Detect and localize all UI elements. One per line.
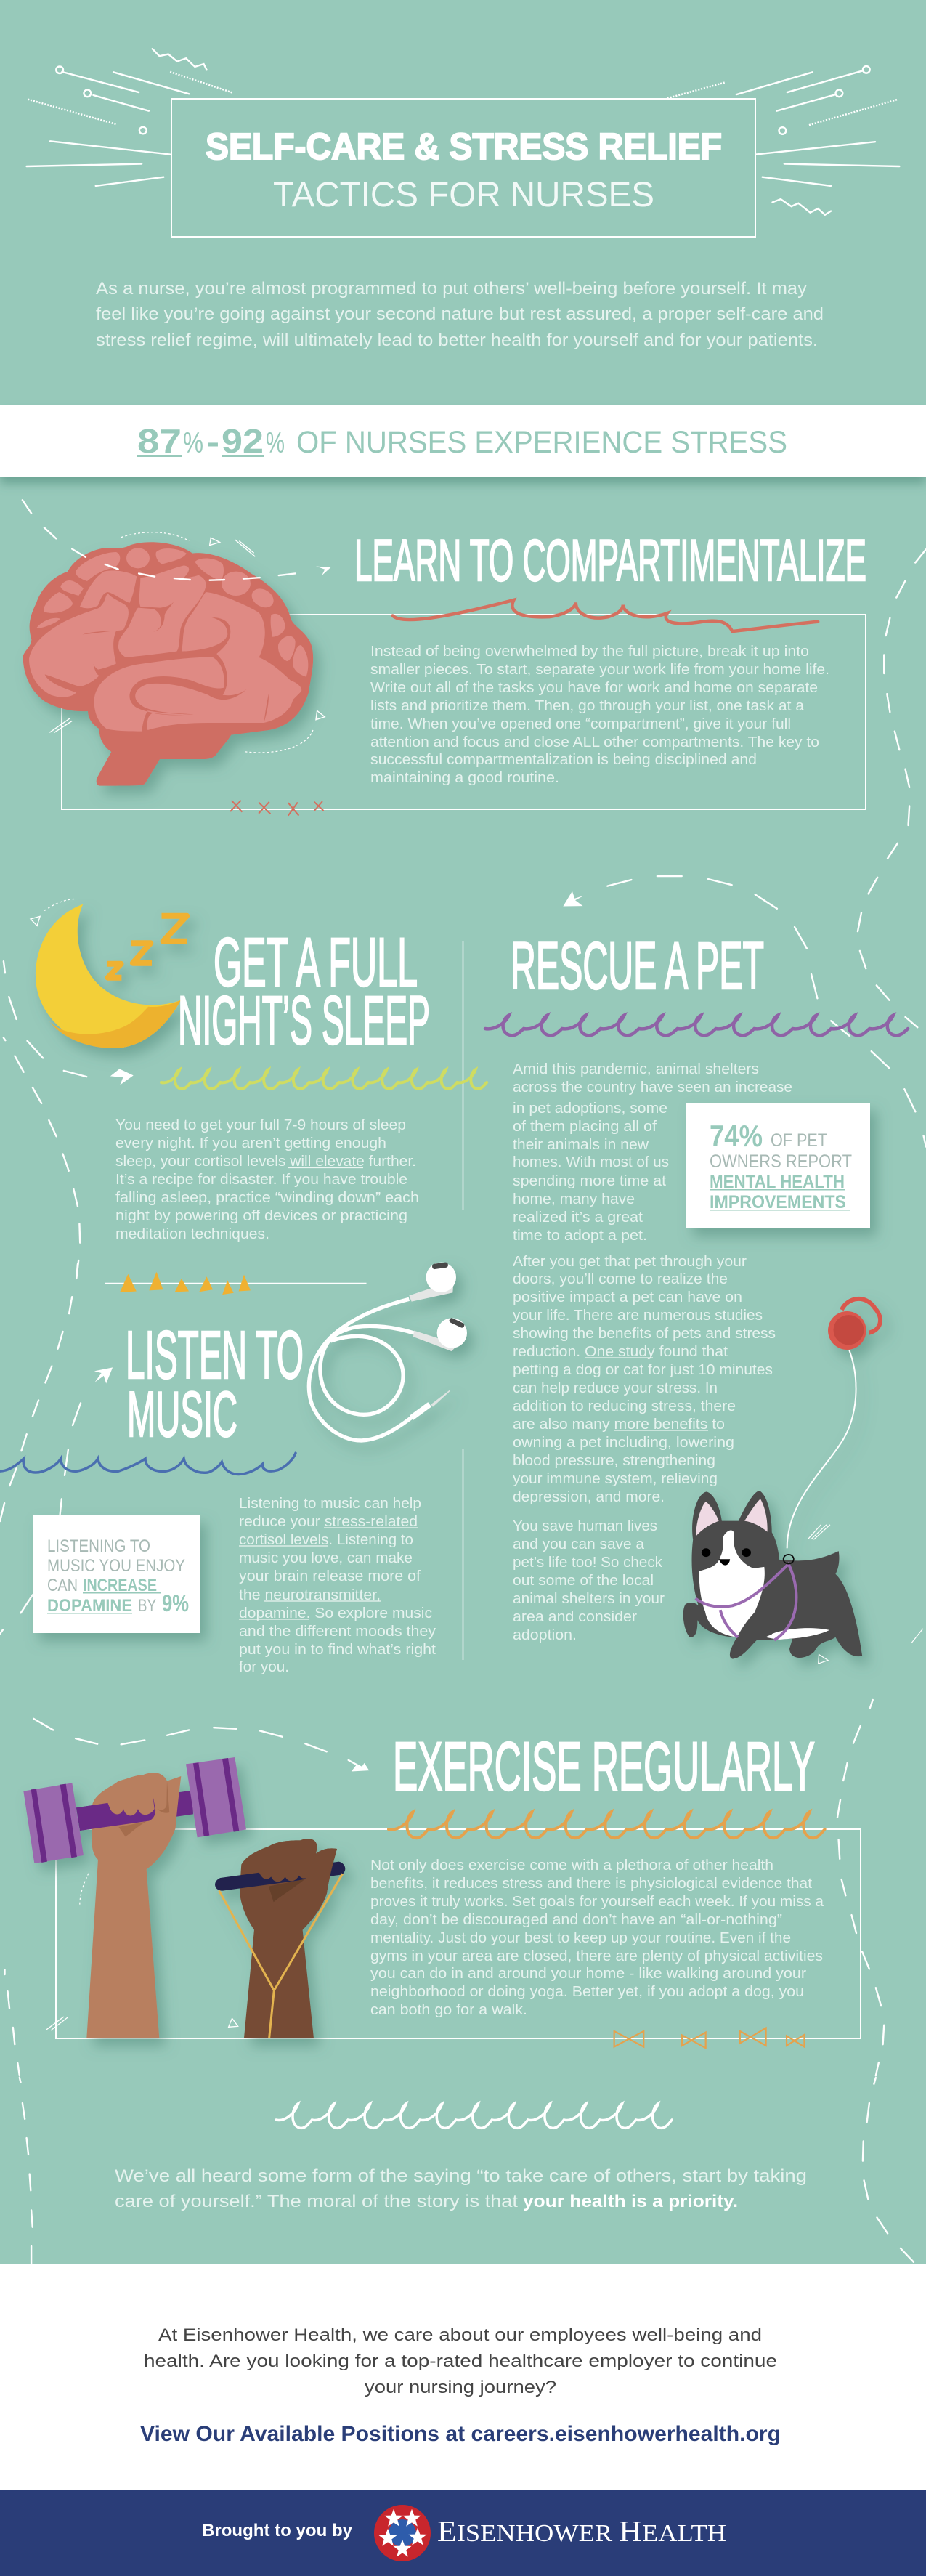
white squiggle <box>276 2104 672 2128</box>
green squiggle <box>161 1069 487 1089</box>
heading: GET A FULL <box>214 924 418 1001</box>
heading <box>126 1317 304 1450</box>
closing text: We’ve all heard some form of the saying “to take care of others, start by taking <box>115 2166 807 2186</box>
left dashed trail <box>4 899 134 1279</box>
callout: 74% <box>686 1103 870 1228</box>
callout: dopamine <box>33 1515 200 1633</box>
closing text: your health is a priority. <box>523 2192 738 2211</box>
employer text <box>144 2325 777 2397</box>
rescue body text: out some of the local <box>513 1573 654 1589</box>
closing section <box>20 2078 914 2264</box>
compartmentalize body text: attention and focus and close ALL other compartments. The key to <box>370 734 819 750</box>
column divider top <box>462 941 463 1210</box>
callout: 74%: MENTAL HEALTH <box>710 1172 845 1192</box>
panel: exercise regularly <box>5 1700 884 2075</box>
stat headline <box>137 422 787 460</box>
rescue body text: homes. With most of us <box>513 1154 669 1170</box>
footer call to action <box>0 2264 926 2490</box>
exercise body text: mentality. Just do your best to keep up your routine. Even if the <box>370 1930 791 1946</box>
stat band <box>0 405 926 477</box>
footer brand band <box>0 2490 926 2576</box>
dog body <box>683 1491 862 1658</box>
rescue body text: your immune system, relieving <box>513 1471 718 1487</box>
callout: dopamine: MUSIC YOU ENJOY <box>47 1556 185 1576</box>
employer text: health. Are you looking for a top-rated healthcare employer to continue <box>144 2352 777 2371</box>
rescue body text: are also many more benefits to <box>513 1417 725 1433</box>
dashed trails <box>5 1700 884 2075</box>
coral squiggle <box>393 600 818 631</box>
callout: dopamine: DOPAMINE <box>47 1596 132 1616</box>
stat headline: - <box>207 425 219 460</box>
callout: dopamine: INCREASE <box>83 1576 157 1595</box>
callout: 74%: OWNERS REPORT <box>710 1151 852 1172</box>
blue squiggle <box>0 1453 296 1474</box>
exercise body text: day, don’t be discouraged and don’t have an “all-or-nothing” <box>370 1912 782 1928</box>
side dashes <box>20 2078 914 2264</box>
music body text: your brain release more of <box>239 1568 421 1584</box>
stat headline: % <box>266 427 285 459</box>
music body text: and the different moods they <box>239 1624 436 1640</box>
content frame <box>62 615 866 809</box>
rescue body text: can help reduce your stress. In <box>513 1380 718 1396</box>
icon: arm with resistance band <box>215 1839 345 2038</box>
rescue body text: your life. There are numerous studies <box>513 1308 763 1324</box>
purple squiggle <box>485 1016 908 1035</box>
rescue body text: adoption. <box>513 1627 577 1643</box>
callout: dopamine: 9% <box>162 1590 189 1616</box>
closing text <box>115 2166 807 2211</box>
sleep body text <box>115 1117 419 1242</box>
exercise body text: benefits, it reduces stress and there is physiological evidence that <box>370 1876 812 1892</box>
rescue body text: owning a pet including, lowering <box>513 1435 734 1451</box>
rescue body text: pet’s life too! So check <box>513 1555 663 1571</box>
rescue body text: animal shelters in your <box>513 1591 665 1607</box>
panel: listen to music <box>0 1262 467 1675</box>
music body text <box>239 1496 436 1675</box>
exercise body text: gyms in your area are closed, there are plenty of physical activities <box>370 1948 823 1964</box>
intro text: stress relief regime, will ultimately lead to better health for yourself and for your patients. <box>96 331 818 350</box>
compartmentalize body text <box>370 644 829 786</box>
sleep body text: night by powering off devices or practicing <box>115 1208 407 1224</box>
header burst decoration <box>27 49 899 215</box>
rescue body text: depression, and more. <box>513 1489 665 1505</box>
yellow tick decoration <box>105 1272 367 1295</box>
sleep body text: You need to get your full 7-9 hours of sleep <box>115 1117 406 1133</box>
compartmentalize body text: time. When you’ve opened one “compartment”, give it your full <box>370 716 791 732</box>
rescue body text: time to adopt a pet. <box>513 1228 647 1244</box>
rescue body text: reduction. One study found that <box>513 1344 728 1360</box>
callout: 74%: 74% <box>710 1119 763 1153</box>
rescue body text: and you can save a <box>513 1536 645 1552</box>
stat headline: 87 <box>137 422 182 460</box>
rescue body text: After you get that pet through your <box>513 1254 747 1270</box>
panel: sleep <box>4 899 487 1279</box>
intro text: feel like you’re going against your second nature but rest assured, a proper self-care and <box>96 304 824 324</box>
rescue body text: area and consider <box>513 1609 637 1625</box>
dashed arc and arrow <box>563 876 926 1147</box>
header section <box>27 49 899 350</box>
careers link: View Our Available Positions at careers.eisenhowerhealth.org <box>140 2422 781 2446</box>
content frame <box>56 1829 861 2038</box>
stat headline: 92 <box>222 422 264 460</box>
sleep body text: falling asleep, practice “winding down” each <box>115 1190 419 1206</box>
dashed trail to heading <box>23 500 330 753</box>
rescue body text: of them placing all of <box>513 1119 657 1135</box>
rescue body text: positive impact a pet can have on <box>513 1289 742 1305</box>
sleep body text: every night. If you aren’t getting enough <box>115 1135 386 1151</box>
compartmentalize body text: Instead of being overwhelmed by the full picture, break it up into <box>370 644 809 660</box>
compartmentalize body text: successful compartmentalization is being disciplined and <box>370 752 757 768</box>
leash line <box>787 1350 856 1548</box>
rescue body text: showing the benefits of pets and stress <box>513 1326 776 1342</box>
sleep body text: meditation techniques. <box>115 1226 269 1242</box>
heading: LISTEN TO <box>126 1317 304 1393</box>
icon: arm with dumbbell <box>23 1757 246 2038</box>
employer text: your nursing journey? <box>365 2378 556 2397</box>
exercise body text: proves it truly works. Set goals for yourself each week. If you miss a <box>370 1894 824 1910</box>
intro text <box>96 279 824 350</box>
coral x marks <box>230 801 324 816</box>
rescue body text: Amid this pandemic, animal shelters <box>513 1061 759 1077</box>
employer text: At Eisenhower Health, we care about our employees well-being and <box>158 2325 762 2345</box>
music body text: the neurotransmitter, <box>239 1587 381 1603</box>
small dog decoration <box>808 1525 923 1664</box>
stat headline: % <box>183 427 203 459</box>
rescue body text: realized it’s a great <box>513 1210 643 1226</box>
rescue body text: across the country have seen an increase <box>513 1080 792 1095</box>
orange bow marks <box>614 2028 804 2048</box>
heading <box>178 924 430 1059</box>
orange squiggle <box>389 1812 825 1838</box>
column divider bottom <box>462 1449 463 1660</box>
subtitle: TACTICS FOR NURSES <box>273 176 654 214</box>
intro text: As a nurse, you’re almost programmed to put others’ well-being before yourself. It may <box>96 279 807 299</box>
rescue body text: their animals in new <box>513 1137 649 1153</box>
logo mark <box>374 2505 431 2561</box>
music body text: reduce your stress-related <box>239 1514 418 1530</box>
rescue body text: spending more time at <box>513 1173 666 1189</box>
exercise body text: Not only does exercise come with a plethora of other health <box>370 1858 773 1874</box>
panel: compartmentalize <box>23 500 866 816</box>
exercise body text: can both go for a walk. <box>370 2002 527 2018</box>
rescue body text: doors, you’ll come to realize the <box>513 1271 728 1287</box>
exercise body text <box>370 1858 824 2018</box>
sleep body text: It’s a recipe for disaster. If you have trouble <box>115 1172 407 1188</box>
callout: dopamine: LISTENING TO <box>47 1536 150 1556</box>
title: SELF-CARE & STRESS RELIEF <box>206 126 722 167</box>
heading: MUSIC <box>127 1378 237 1450</box>
sleep body text: sleep, your cortisol levels will elevate further. <box>115 1154 416 1170</box>
compartmentalize body text: smaller pieces. To start, separate your work life from your home life. <box>370 662 829 678</box>
icon: brain <box>23 542 313 786</box>
music body text: for you. <box>239 1659 289 1675</box>
rescue body text: petting a dog or cat for just 10 minutes <box>513 1362 773 1378</box>
stat headline: OF NURSES EXPERIENCE STRESS <box>296 425 787 460</box>
dashed trail <box>0 1264 113 1634</box>
panel: sleep: NIGHT’S SLEEP <box>178 982 430 1059</box>
music body text: cortisol levels. Listening to <box>239 1532 413 1548</box>
rescue body text: addition to reducing stress, there <box>513 1398 736 1414</box>
callout: 74%: IMPROVEMENTS <box>710 1192 846 1212</box>
callout: dopamine: BY <box>138 1596 156 1616</box>
logo wordmark: EISENHOWER HEALTH <box>437 2514 726 2548</box>
callout: 74%: OF PET <box>771 1130 827 1151</box>
exercise body text: you can do in and around your home - like walking around your <box>370 1966 806 1982</box>
brought to you by: Brought to you by <box>202 2521 353 2540</box>
rescue body text: home, many have <box>513 1191 635 1207</box>
closing text: care of yourself.” The moral of the story is that <box>115 2192 518 2211</box>
music body text: dopamine. So explore music <box>239 1605 432 1621</box>
music body text: music you love, can make <box>239 1550 413 1566</box>
rescue body text: in pet adoptions, some <box>513 1101 667 1117</box>
leash reel <box>828 1299 880 1350</box>
compartmentalize body text: lists and prioritize them. Then, go through your list, one task at a <box>370 698 805 714</box>
compartmentalize body text: maintaining a good routine. <box>370 770 559 786</box>
music body text: put you in to find what’s right <box>239 1642 436 1658</box>
compartmentalize body text: Write out all of the tasks you have for work and home on separate <box>370 680 818 696</box>
icon: moon and zzz <box>36 904 187 1048</box>
callout: dopamine: CAN <box>47 1576 78 1595</box>
panel: rescue a pet <box>485 876 926 1664</box>
right dashed trail <box>884 549 926 859</box>
title box <box>171 99 755 237</box>
exercise body text: neighborhood or doing yoga. Better yet, if you adopt a dog, you <box>370 1984 804 2000</box>
rescue body text: You save human lives <box>513 1518 657 1534</box>
icon: dog on retractable leash <box>683 1299 880 1658</box>
icon: earbuds <box>309 1262 467 1441</box>
music body text: Listening to music can help <box>239 1496 421 1512</box>
rescue body text <box>513 1061 792 1643</box>
rescue body text: blood pressure, strengthening <box>513 1453 715 1469</box>
